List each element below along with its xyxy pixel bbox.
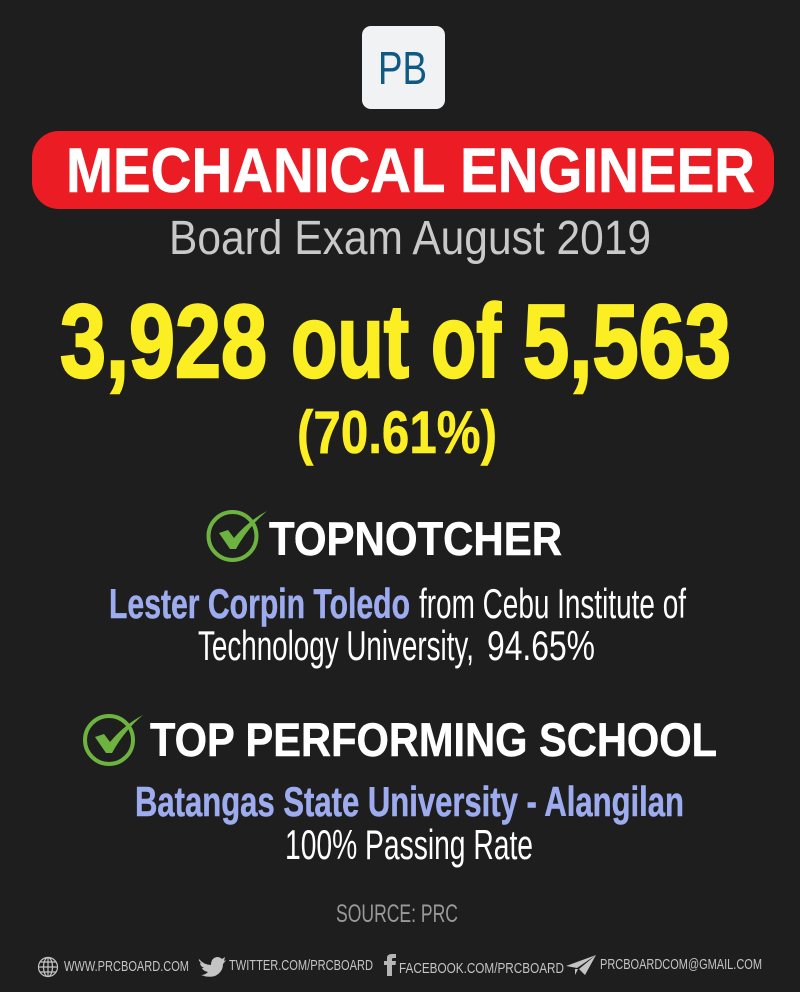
passers statistic: out <box>291 284 409 400</box>
heading: top performing school: TOP PERFORMING SCHOOL <box>150 713 717 766</box>
school details <box>135 778 684 868</box>
passers statistic: of <box>431 284 501 400</box>
subtitle: Board Exam August 2019 <box>169 212 651 265</box>
icon: globe <box>38 958 58 976</box>
source: SOURCE: PRC <box>336 900 458 928</box>
icon: check top school <box>85 715 143 764</box>
icon: check topnotcher <box>208 511 267 560</box>
topnotcher details: Technology University, <box>198 622 474 669</box>
facebook handle: FACEBOOK.COM/PRCBOARD <box>399 960 564 977</box>
heading: topnotcher: TOPNOTCHER <box>269 512 562 565</box>
website: WWW.PRCBOARD.COM <box>64 958 189 975</box>
icon: facebook <box>384 954 396 976</box>
topnotcher details: Lester Corpin Toledo <box>109 580 410 627</box>
icon: twitter <box>199 957 226 977</box>
passers statistic <box>60 284 731 400</box>
passers statistic: 3,928 <box>60 284 267 400</box>
passers statistic: 5,563 <box>523 284 731 400</box>
twitter handle: TWITTER.COM/PRCBOARD <box>229 957 373 974</box>
school details: 100% Passing Rate <box>285 821 533 868</box>
logo: PB: PB <box>378 42 427 94</box>
passing percentage: (70.61%) <box>297 399 497 466</box>
logo: PB <box>362 26 445 109</box>
topnotcher details: 94.65% <box>487 622 595 669</box>
footer contacts <box>38 954 762 977</box>
icon: paper plane <box>566 955 596 975</box>
topnotcher details <box>109 580 686 669</box>
